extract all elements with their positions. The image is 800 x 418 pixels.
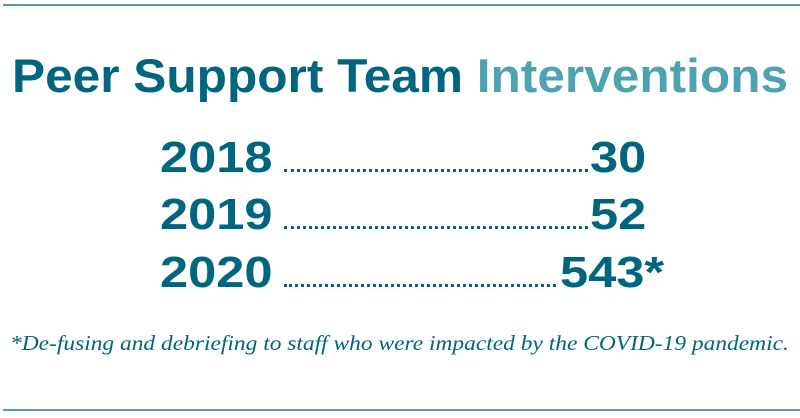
row: 2019: 52	[590, 190, 646, 239]
row: 2018: 30	[590, 133, 646, 182]
footnote: *De-fusing and debriefing to staff who were impacted by the COVID-19 pandemic.	[10, 331, 789, 355]
title: Peer Support Team Interventions	[12, 49, 788, 102]
row: 2018	[160, 133, 646, 182]
row: 2019	[160, 190, 646, 239]
row: 2020: 543*	[560, 248, 664, 297]
row: 2018: 2018	[160, 133, 273, 182]
row: 2020	[160, 248, 664, 297]
row: 2019: 2019	[160, 190, 273, 239]
row: 2020: 2020	[160, 248, 273, 297]
